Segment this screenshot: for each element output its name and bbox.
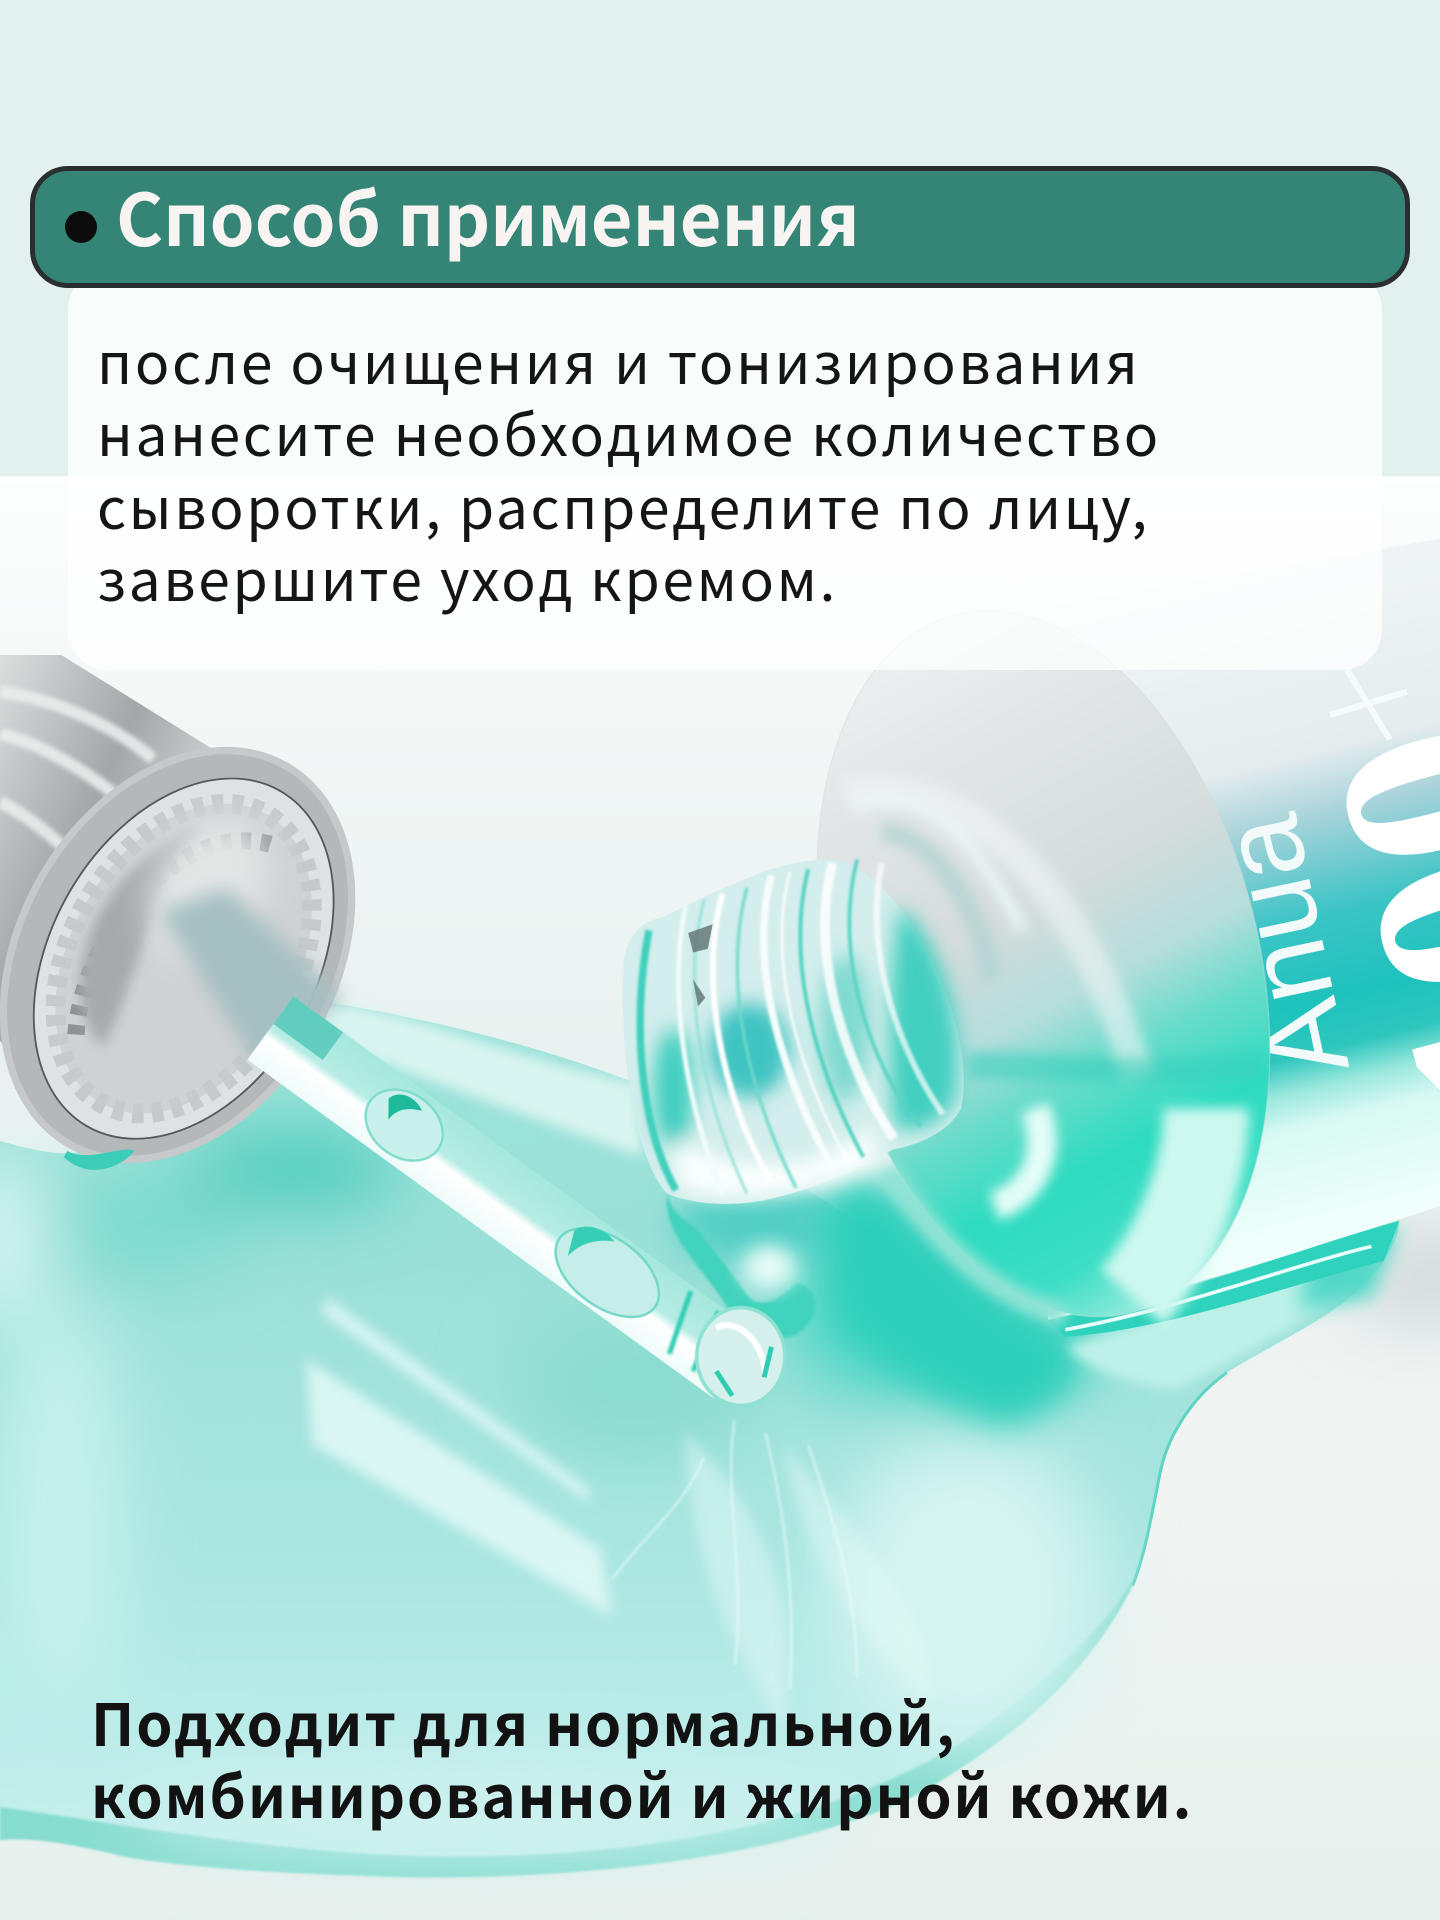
skin type note bbox=[91, 1679, 1193, 1835]
skin type note: комбинированной и жирной кожи. bbox=[91, 1751, 1193, 1835]
header pill bbox=[30, 166, 1410, 288]
cap threaded body bbox=[0, 655, 233, 1151]
bright interior center bbox=[127, 798, 289, 977]
serum puddle bbox=[0, 998, 1400, 1877]
teal wedge near bottle base bbox=[1298, 1224, 1400, 1310]
pale highlight beside stream bbox=[742, 1245, 796, 1289]
instruction text panel bbox=[68, 270, 1382, 670]
bullet dot bbox=[65, 211, 97, 243]
product photo scene bbox=[0, 476, 1440, 1879]
air bubble lower bbox=[540, 1210, 675, 1335]
pipette tube bbox=[247, 996, 759, 1398]
teal band under the bottle bbox=[1048, 1221, 1400, 1337]
shoulder highlights bbox=[845, 792, 1261, 1316]
instructions text: завершите уход кремом. bbox=[97, 536, 838, 618]
wordmark on bottle: Anua bbox=[1195, 805, 1373, 1089]
bottle body bbox=[1016, 539, 1440, 1320]
tube top serum band bbox=[273, 996, 343, 1060]
glass dropper pipette bbox=[247, 996, 785, 1406]
instructions text: после очищения и тонизирования bbox=[97, 319, 1140, 401]
falling serum stream bbox=[667, 1194, 815, 1338]
droplet streaks below pipette tip bbox=[612, 1420, 857, 1690]
air bubble upper bbox=[352, 1075, 457, 1175]
deep teal serum swath bbox=[818, 1178, 1079, 1426]
serum under the neck bbox=[673, 1183, 845, 1266]
pipette tip bulb bbox=[697, 1308, 785, 1406]
skin type note: Подходит для нормальной, bbox=[91, 1679, 956, 1763]
instructions text: нанесите необходимое количество bbox=[97, 391, 1161, 473]
glass shoulder bbox=[747, 562, 1339, 1365]
white raised lobe behind dropper bbox=[288, 998, 643, 1157]
plus sign on bottle bbox=[1330, 670, 1407, 739]
dark upper-left interior bbox=[80, 826, 202, 1047]
white highlight in the band bbox=[1065, 1246, 1371, 1330]
instructions text: сыворотки, распределите по лицу, bbox=[97, 464, 1150, 546]
dropper stem inside cap bbox=[159, 888, 343, 1065]
pale band right of the swath bbox=[1065, 1249, 1384, 1390]
tube streaks near tip bbox=[653, 1291, 730, 1371]
bottle cap bbox=[0, 655, 422, 1222]
dropper reflection in puddle bbox=[306, 1298, 932, 1726]
instructions text bbox=[97, 319, 1161, 618]
bottle neck with serum bbox=[622, 859, 964, 1204]
cap edge serum drip bbox=[64, 1150, 135, 1170]
toothed inner ring bbox=[3, 758, 364, 1159]
dark glints at neck opening bbox=[688, 924, 713, 1006]
dark teeth on upper-left arc bbox=[76, 841, 272, 1035]
puddle lip at bottom edge bbox=[0, 1579, 1133, 1877]
title: Способ применения bbox=[116, 162, 860, 267]
background surface bbox=[0, 476, 1440, 1920]
teal tones inside neck bbox=[654, 906, 958, 1196]
bottle body and shoulder bbox=[747, 539, 1440, 1365]
shadow under bottle on the right bbox=[1347, 1240, 1440, 1319]
cap inner liner bbox=[0, 725, 395, 1192]
cap rim bbox=[0, 688, 422, 1222]
puddle right rim bbox=[1133, 1372, 1227, 1586]
soft tonal variations in the puddle bbox=[0, 1135, 1102, 1849]
